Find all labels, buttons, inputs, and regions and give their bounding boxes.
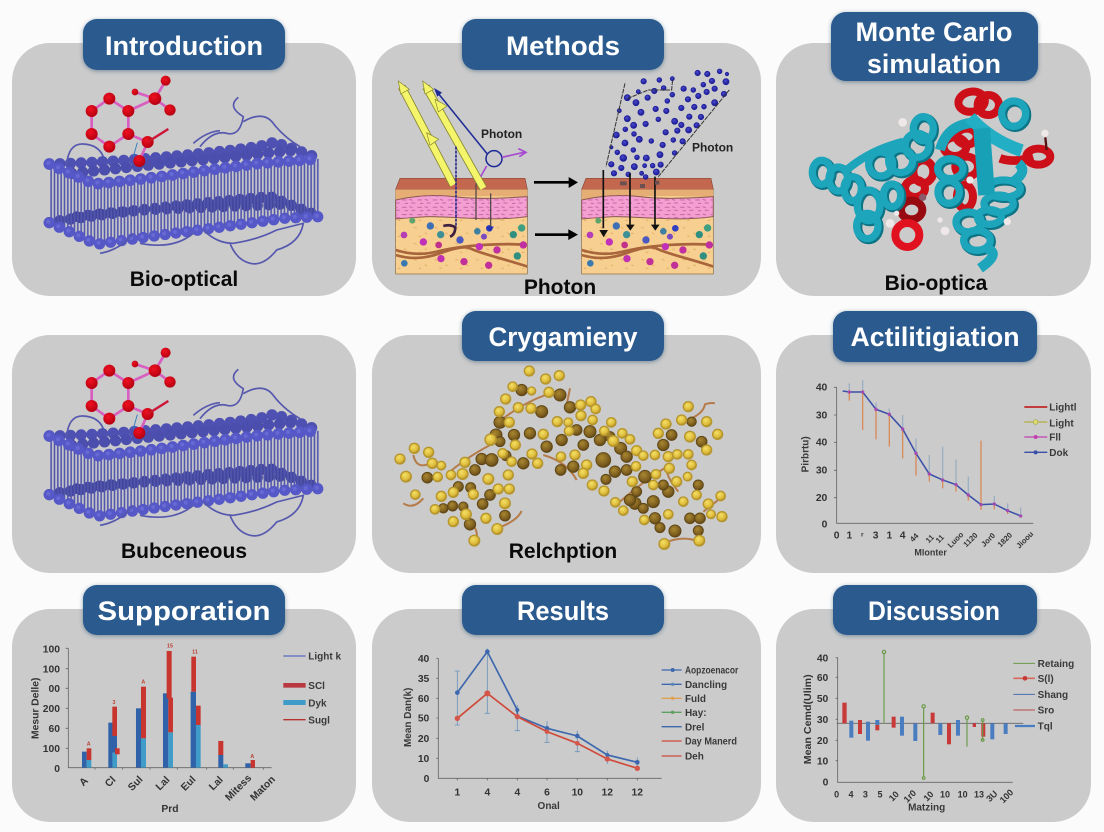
y axis labels: 0 <box>823 777 829 788</box>
heading: Supporation <box>83 585 285 635</box>
heading: Methods: Methods <box>506 31 620 61</box>
skin diagram with reflected photons <box>396 69 733 274</box>
red bars <box>87 651 255 768</box>
y axis labels: 60 <box>817 673 829 684</box>
panel background <box>372 609 761 822</box>
diverging bar chart <box>803 650 1074 814</box>
blue arrow and scatter circle <box>434 88 526 177</box>
heading: Monte Carlo simulation: Monte Carlo <box>856 17 1012 47</box>
dark teal underlay <box>814 102 1027 252</box>
heading: Monte Carlo simulation <box>831 12 1038 81</box>
panel: crygamieny <box>372 311 761 573</box>
y axis labels: 0 <box>54 764 60 775</box>
bar value labels: A <box>250 754 254 760</box>
heading: Methods <box>462 19 664 70</box>
membrane illustration <box>48 97 320 264</box>
legend: Fll <box>1049 433 1061 444</box>
arrows between blocks <box>534 177 578 240</box>
x axis labels: 1 <box>886 531 892 542</box>
x axis labels: 1120 <box>961 531 980 549</box>
legend <box>1024 403 1077 459</box>
blue bars <box>849 717 1008 741</box>
x axis labels <box>834 529 1035 550</box>
axis titles: Mlonter <box>914 548 947 558</box>
legend: Lightl <box>1049 403 1077 414</box>
x axis title: Prd <box>161 804 179 815</box>
axes <box>66 648 272 770</box>
x axis labels: 1 <box>846 531 852 542</box>
y axis labels: 40 <box>816 438 828 449</box>
x axis labels: Jor0 <box>979 531 997 549</box>
heading: Introduction <box>83 19 285 70</box>
y axis title: Mean Dan(k) <box>403 688 414 747</box>
x axis labels: 4 <box>514 787 520 798</box>
legend: S(l) <box>1038 674 1054 685</box>
y axis labels: 35 <box>418 674 430 685</box>
photon cloud <box>609 69 729 179</box>
gold protein illustration <box>395 366 727 549</box>
x axis labels: Sul <box>126 774 146 793</box>
legend: Fuld <box>685 694 706 705</box>
dark beads <box>422 384 707 537</box>
blue series <box>455 649 640 765</box>
y axis labels: 60 <box>418 694 430 705</box>
membrane illustration <box>48 369 320 536</box>
x axis labels: 0 <box>834 789 839 799</box>
caption: Bubceneous <box>121 540 247 563</box>
heading: Crygamieny: Crygamieny <box>488 322 638 352</box>
red series <box>455 690 640 771</box>
y axis labels: 50 <box>817 694 829 705</box>
data markers <box>848 390 1022 518</box>
yellow arrows <box>398 81 483 188</box>
y axis labels: 50 <box>418 714 430 725</box>
light blue bars <box>87 725 228 768</box>
legend: Retaing <box>1038 659 1074 670</box>
axes <box>836 658 1023 782</box>
panel background <box>12 609 356 822</box>
axis titles <box>800 436 947 558</box>
panel background <box>12 43 356 296</box>
y axis labels: 100 <box>43 664 60 675</box>
x axis labels: 1 <box>454 787 460 798</box>
panel background <box>372 43 761 296</box>
panel: second membrane <box>12 335 356 573</box>
legend: Light k <box>308 651 341 662</box>
x axis labels: 1r0 <box>902 788 918 804</box>
legend <box>1013 659 1074 733</box>
x axis labels: 10 <box>958 789 968 799</box>
x axis labels: 3 <box>873 531 879 542</box>
y axis title: Mesur Delle) <box>30 678 41 739</box>
line chart <box>403 648 738 812</box>
heading: Introduction: Introduction <box>105 31 263 61</box>
y axis labels: 20 <box>816 493 828 504</box>
legend: SCl <box>308 681 325 692</box>
axes <box>436 658 662 780</box>
panel: actilitigiation <box>776 311 1091 573</box>
y axis labels <box>816 383 828 530</box>
y axis labels: 30 <box>816 466 828 477</box>
x axis labels: 10 <box>572 787 583 798</box>
y axis labels: 00 <box>48 684 60 695</box>
icon: red molecule <box>86 76 176 167</box>
y axis labels: 40 <box>816 383 828 394</box>
red coils <box>895 89 1050 247</box>
backbone strands <box>403 388 722 543</box>
legend: Sugl <box>308 715 330 726</box>
x axis labels: 11 <box>934 532 946 545</box>
y axis labels: 100 <box>43 644 60 655</box>
panel background <box>12 335 356 573</box>
x axis labels: Lal <box>154 775 172 793</box>
legend: Hay: <box>685 708 707 719</box>
x axis labels: A <box>78 775 91 789</box>
panel background <box>776 43 1091 296</box>
heading: Results <box>462 585 664 635</box>
legend: Deh <box>685 752 704 763</box>
caption: Relchption <box>509 540 617 563</box>
label: Photon right: Photon <box>692 140 733 154</box>
x axis labels: Luoo <box>946 530 966 550</box>
legend: Light <box>1049 418 1074 429</box>
y axis labels: 30 <box>816 410 828 421</box>
skin block: left <box>396 178 527 274</box>
x axis labels: r <box>861 532 864 539</box>
x axis labels: 3 <box>863 789 868 799</box>
x axis labels: 44 <box>908 531 921 544</box>
y axis labels: 20 <box>418 734 430 745</box>
legend: Dancling <box>685 680 727 691</box>
hydrogen atoms <box>886 118 1049 235</box>
bar chart <box>30 644 341 815</box>
down arrows <box>599 170 660 237</box>
data line <box>843 391 1021 516</box>
x axis labels: 5 <box>877 789 882 799</box>
x axis labels <box>834 787 1015 805</box>
heading: Discussion: Discussion <box>868 596 1000 626</box>
x axis labels: Mitess <box>224 773 254 803</box>
bar value labels <box>87 644 254 760</box>
teal coils <box>812 101 1026 268</box>
panel: monte carlo simulation <box>776 12 1091 296</box>
y axis labels: 200 <box>43 704 60 715</box>
x axis labels: 0 <box>834 531 840 542</box>
line chart <box>800 380 1077 558</box>
legend <box>662 666 738 763</box>
x axis labels: 100 <box>998 787 1015 805</box>
legend: Dok <box>1049 448 1069 459</box>
y axis labels: 10 <box>418 754 430 765</box>
y axis labels: 20 <box>817 736 829 747</box>
y axis labels: 60 <box>48 724 60 735</box>
protein ribbon illustration <box>812 89 1050 268</box>
heading: Supporation: Supporation <box>98 596 270 626</box>
y axis labels: 0 <box>424 774 430 785</box>
panel: discussion <box>776 585 1091 822</box>
panel background <box>776 609 1091 822</box>
heading: Results: Results <box>517 596 609 626</box>
panel: results <box>372 585 761 822</box>
heading: Crygamieny <box>462 311 664 361</box>
bar value labels: A <box>87 742 91 748</box>
bar value labels: 11 <box>192 649 198 655</box>
x axis labels: Lal <box>207 775 226 793</box>
icon: red molecule <box>86 348 176 439</box>
x axis labels <box>78 773 278 804</box>
error bars <box>849 380 1021 517</box>
y axis labels <box>418 654 430 785</box>
y axis labels: 0 <box>822 519 828 530</box>
x axis labels: 4 <box>848 789 853 799</box>
label: Photon: Photon <box>481 127 522 141</box>
axes <box>834 387 1033 523</box>
legend: Dyk <box>308 699 327 710</box>
axis titles: Pirbrtu) <box>800 436 811 472</box>
panel: supporation <box>12 585 356 822</box>
x axis title: Matzing <box>908 803 945 814</box>
cone outlines <box>606 79 729 177</box>
x axis labels: 11 <box>924 532 936 545</box>
green whiskers <box>882 650 984 779</box>
bar value labels: A <box>141 679 145 685</box>
x axis labels: 10 <box>921 789 936 803</box>
legend: Drel <box>685 722 705 733</box>
legend <box>283 651 341 726</box>
caption: Photon <box>524 276 596 299</box>
x axis labels: Cl <box>103 775 119 790</box>
skin block: right <box>582 178 713 274</box>
legend: Aopzoenacor <box>685 666 738 677</box>
y axis labels: 10 <box>817 756 829 767</box>
y axis labels: 40 <box>418 654 430 665</box>
legend: Sro <box>1038 706 1054 717</box>
y axis labels <box>817 653 829 788</box>
x axis labels: 10 <box>887 789 901 803</box>
legend: Shang <box>1038 690 1068 701</box>
x axis labels: 4 <box>484 787 490 798</box>
x axis labels: 6 <box>544 787 550 798</box>
x axis title: Onal <box>538 801 560 812</box>
x axis labels: 13 <box>974 789 984 799</box>
yellow beads <box>395 366 727 549</box>
red bars <box>842 703 985 744</box>
x axis labels <box>454 787 643 798</box>
x axis labels: 3U <box>984 789 999 804</box>
x axis labels: 1820 <box>996 531 1014 549</box>
y axis title: Mean Cemd(Ulim) <box>803 674 814 764</box>
legend: Tql <box>1038 722 1053 733</box>
x axis labels: Maton <box>249 774 278 804</box>
x axis labels: 10 <box>940 789 950 799</box>
heading: Actilitigiation <box>833 311 1037 362</box>
bar value labels: 15 <box>167 644 173 650</box>
y axis labels: 30 <box>817 715 829 726</box>
heading: Actilitigiation: Actilitigiation <box>850 322 1020 352</box>
caption: Bio-optica <box>885 272 988 295</box>
x axis labels: Jioou <box>1014 529 1035 550</box>
y axis labels <box>43 644 60 775</box>
x axis labels: 4 <box>900 531 906 542</box>
legend: Day Manerd <box>685 737 737 748</box>
x axis labels: 12 <box>602 787 613 798</box>
blue bars <box>82 692 251 768</box>
panel: methods <box>372 19 761 299</box>
y axis labels: 100 <box>43 744 60 755</box>
panel: introduction <box>12 19 356 296</box>
caption: Bio-optical <box>130 268 238 291</box>
photon tracks in skin <box>443 147 494 237</box>
panel background <box>776 335 1091 573</box>
y axis labels: 40 <box>817 653 829 664</box>
heading: Monte Carlo simulation: simulation <box>867 49 1001 79</box>
x axis labels: 12 <box>632 787 643 798</box>
bar value labels: 3 <box>113 700 116 706</box>
x axis labels: Eul <box>179 774 199 793</box>
error bars <box>455 648 637 770</box>
heading: Discussion <box>833 585 1037 635</box>
panel background <box>372 335 761 573</box>
